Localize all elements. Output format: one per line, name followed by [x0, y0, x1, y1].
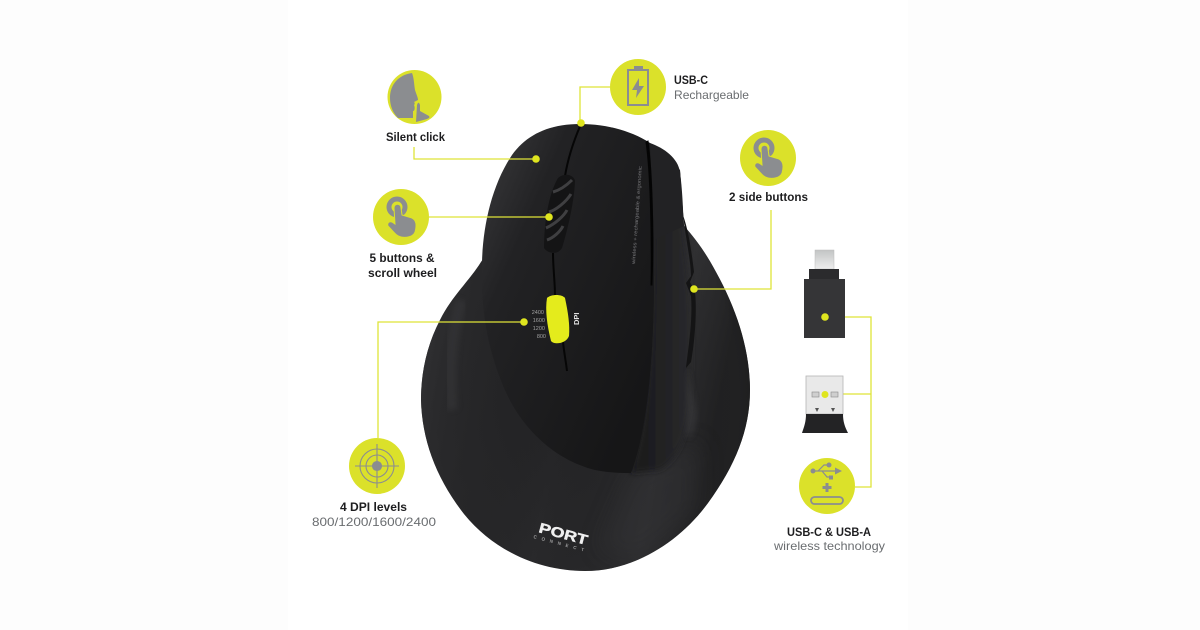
USB-C adapter — [804, 250, 845, 338]
feature: silent click — [386, 70, 445, 144]
top shell — [482, 124, 654, 473]
brand logo: PORT — [537, 519, 590, 548]
brand logo: CONNECT — [533, 534, 585, 552]
label: 5 buttons & — [370, 251, 435, 265]
feature: USB-C and USB-A wireless: wireless technology — [773, 539, 885, 553]
icon: silent face — [388, 70, 442, 124]
right groove — [646, 141, 653, 285]
icon: target — [349, 438, 405, 494]
right body side — [630, 170, 684, 475]
feature: USB-C rechargeable — [610, 59, 749, 115]
label: 2 side buttons — [729, 190, 808, 204]
USB-A dongle — [802, 376, 848, 433]
callout dots — [520, 119, 698, 326]
body print text: wireless + rechargeable & ergonomic — [631, 165, 644, 264]
callout lines — [378, 87, 871, 487]
label: 4 DPI levels — [340, 500, 407, 514]
feature: 4 DPI levels — [312, 438, 436, 529]
side buttons — [683, 215, 696, 368]
feature: USB-C rechargeable: Rechargeable — [674, 88, 749, 102]
brand logo — [533, 519, 590, 553]
top seam — [553, 124, 581, 371]
feature: 5 buttons and scroll wheel: scroll wheel — [368, 266, 437, 280]
DPI button: DPI — [572, 312, 581, 325]
base shading — [450, 141, 700, 560]
feature: USB-C and USB-A wireless — [773, 458, 885, 553]
DPI scale: 1200 — [533, 326, 545, 332]
thumb recess — [686, 368, 697, 438]
DPI scale — [532, 310, 546, 340]
DPI scale: 800 — [537, 334, 546, 340]
feature: 2 side buttons — [729, 130, 808, 204]
feature: 4 DPI levels: 800/1200/1600/2400 — [312, 515, 436, 529]
icon: tapping finger — [740, 130, 796, 186]
feature: 5 buttons and scroll wheel — [368, 189, 437, 280]
icon: tapping finger — [373, 189, 429, 245]
icon: battery — [610, 59, 666, 115]
mouse body — [421, 124, 750, 571]
mouse base — [421, 124, 750, 571]
label: Silent click — [386, 130, 445, 144]
label: USB-C — [674, 73, 708, 87]
scroll wheel — [544, 175, 575, 253]
DPI scale: 1600 — [533, 318, 545, 324]
DPI button — [546, 295, 581, 343]
icon: USB symbols — [799, 458, 855, 514]
shell shoulder — [650, 143, 684, 240]
label: USB-C & USB-A — [787, 525, 871, 539]
DPI scale: 2400 — [532, 310, 544, 316]
